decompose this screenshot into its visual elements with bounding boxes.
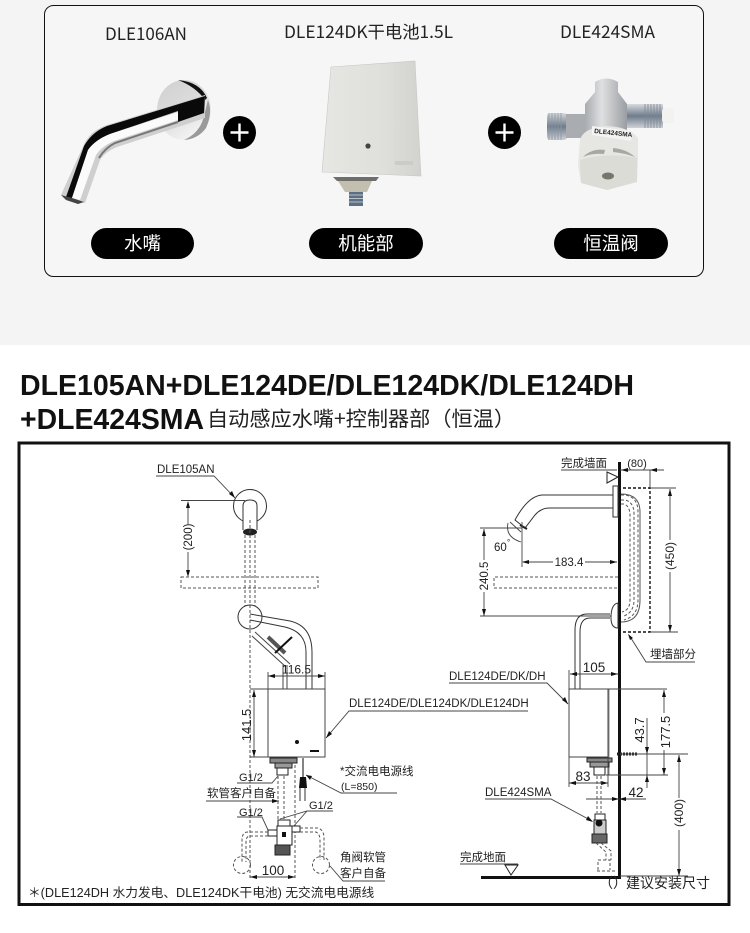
dimension: 100: 100 [262, 863, 284, 878]
label: finished floor: 完成地面 [460, 850, 506, 864]
dimension: 43.7: 43.7 [632, 717, 647, 743]
pipe elbow [238, 605, 312, 689]
dimension: 450 [650, 488, 678, 632]
dimension: 240.5 [479, 529, 612, 616]
diagram: front view [28, 464, 529, 900]
title: DLE105AN+DLE124DE/DLE124DK/DLE124DH [20, 370, 634, 402]
label: G1/2 left: G1/2 [239, 807, 263, 819]
pill: 机能部: 机能部 [338, 230, 394, 256]
icon: thermostatic valve: DLE424SMA [594, 128, 633, 139]
dimension: 183.4: 183.4 [555, 557, 584, 569]
pill: 水嘴 [91, 228, 194, 259]
wall bolt [617, 752, 637, 756]
dimension: 183.4 [522, 557, 617, 569]
valve front [268, 820, 300, 855]
label: DLE124DE front: DLE124DE/DLE124DK/DLE124DH [349, 698, 529, 710]
dimension: 80: (80) [627, 458, 647, 470]
label: buried part: 埋墙部分 [650, 647, 696, 661]
icon: thermostatic valve [547, 78, 674, 190]
dimension: 450: (450) [663, 542, 677, 570]
diagram: side view [449, 456, 710, 891]
label: DLE424SMA side [485, 787, 593, 822]
label: DLE124DE/DK/DH [449, 671, 568, 704]
dimension: 400 [620, 755, 688, 876]
dimension: 105 [569, 660, 618, 689]
lower elbow and supply pipe [575, 603, 618, 689]
dimension: 177.5: 177.5 [658, 716, 673, 748]
footnote: ＊(DLE124DH 水力发电、DLE124DK干电池) 无交流电电源线 [28, 885, 374, 900]
pill: 恒温阀: 恒温阀 [583, 230, 639, 256]
pill: 机能部 [309, 228, 423, 259]
dimension: 141.5: 141.5 [239, 709, 254, 741]
label: G1/2 left [237, 807, 268, 830]
label: DLE424SMA side: DLE424SMA [485, 787, 552, 799]
icon: control box [322, 61, 421, 206]
dimension: 83: 83 [575, 769, 591, 784]
dimension: 60 degree: ° [507, 538, 510, 547]
label: G1/2 upper [237, 772, 278, 784]
label: finished floor [460, 850, 518, 875]
title: +DLE424SMA [20, 404, 204, 436]
label: DLE124DE front [326, 698, 529, 738]
pill: 水嘴: 水嘴 [124, 230, 161, 256]
label: DLE124DK: DLE124DK干电池1.5L [284, 18, 453, 43]
buried area dashed [623, 488, 650, 632]
label: DLE124DE/DK/DH: DLE124DE/DK/DH [449, 671, 546, 683]
dimension: 177.5 [606, 689, 673, 775]
label: AC power cord: (L=850) [341, 781, 377, 793]
label: finished wall [561, 456, 618, 483]
label: angle valve hose: 客户自备 [340, 866, 386, 880]
label: hose by customer [206, 786, 279, 803]
pill: 恒温阀 [554, 228, 668, 259]
label: finished wall: 完成墙面 [561, 456, 607, 470]
label: DLE424SMA: DLE424SMA [560, 18, 656, 43]
label: DLE105AN front: DLE105AN [157, 464, 215, 476]
dashed pipe lines [245, 520, 295, 880]
dashed supply hoses and angle valves [234, 828, 330, 874]
spout side view [515, 486, 618, 529]
note: recommended dimensions: 建议安装尺寸 [626, 875, 710, 891]
dimension: 80 [620, 458, 664, 488]
dimension: 200: (200) [183, 523, 195, 550]
power cord and plug [299, 758, 307, 801]
dimension: 141.5 [239, 689, 268, 757]
counter dashed side [494, 577, 618, 588]
valve side [592, 776, 617, 871]
label: G1/2 right: G1/2 [309, 800, 333, 812]
dimension: 116.5: 116.5 [282, 662, 311, 676]
control box front [268, 689, 325, 775]
control box side [569, 689, 612, 775]
label: buried part [628, 634, 696, 662]
icon: faucet spout [61, 80, 211, 204]
note: recommended dimensions: （） [599, 875, 627, 891]
panel: installation diagram frame [19, 443, 729, 904]
dimension: 42: 42 [628, 785, 644, 800]
dimension: 100 [250, 863, 295, 879]
icon: plus 1 [223, 116, 256, 149]
dashed hose stubs [278, 776, 284, 820]
dimension: 400: (400) [672, 799, 686, 827]
buried pipes [621, 494, 640, 622]
icon: plus 2 [488, 116, 521, 149]
dimension: 240.5: 240.5 [479, 562, 491, 590]
title: 自动感应水嘴+控制器部（恒温） [207, 402, 515, 432]
label: angle valve hose: 角阀软管 [340, 850, 386, 864]
dimension: 42 [586, 785, 646, 801]
label: G1/2 right [280, 800, 333, 827]
wall and floor [481, 462, 620, 878]
dimension: 83 [569, 757, 608, 787]
spout front view [234, 490, 266, 536]
dimension: 200 [181, 500, 245, 577]
label: hose by customer: 软管客户自备 [207, 786, 276, 800]
label: AC power cord [306, 764, 414, 793]
dimension: 105: 105 [583, 660, 605, 675]
label: DLE105AN front [156, 464, 235, 498]
dimension: 60 degree: 60 [494, 542, 507, 554]
dimension: 43.7 [620, 717, 688, 788]
title [20, 370, 634, 436]
label: G1/2 upper: G1/2 [239, 772, 263, 784]
panel: product components [44, 6, 704, 276]
dimension: 116.5 [268, 662, 325, 689]
dimension: 60 degree [480, 522, 522, 567]
label: DLE106AN: DLE106AN [105, 20, 187, 45]
label: AC power cord: *交流电电源线 [340, 764, 414, 778]
counter dashed outline [181, 577, 318, 588]
label: angle valve hose [330, 850, 386, 881]
